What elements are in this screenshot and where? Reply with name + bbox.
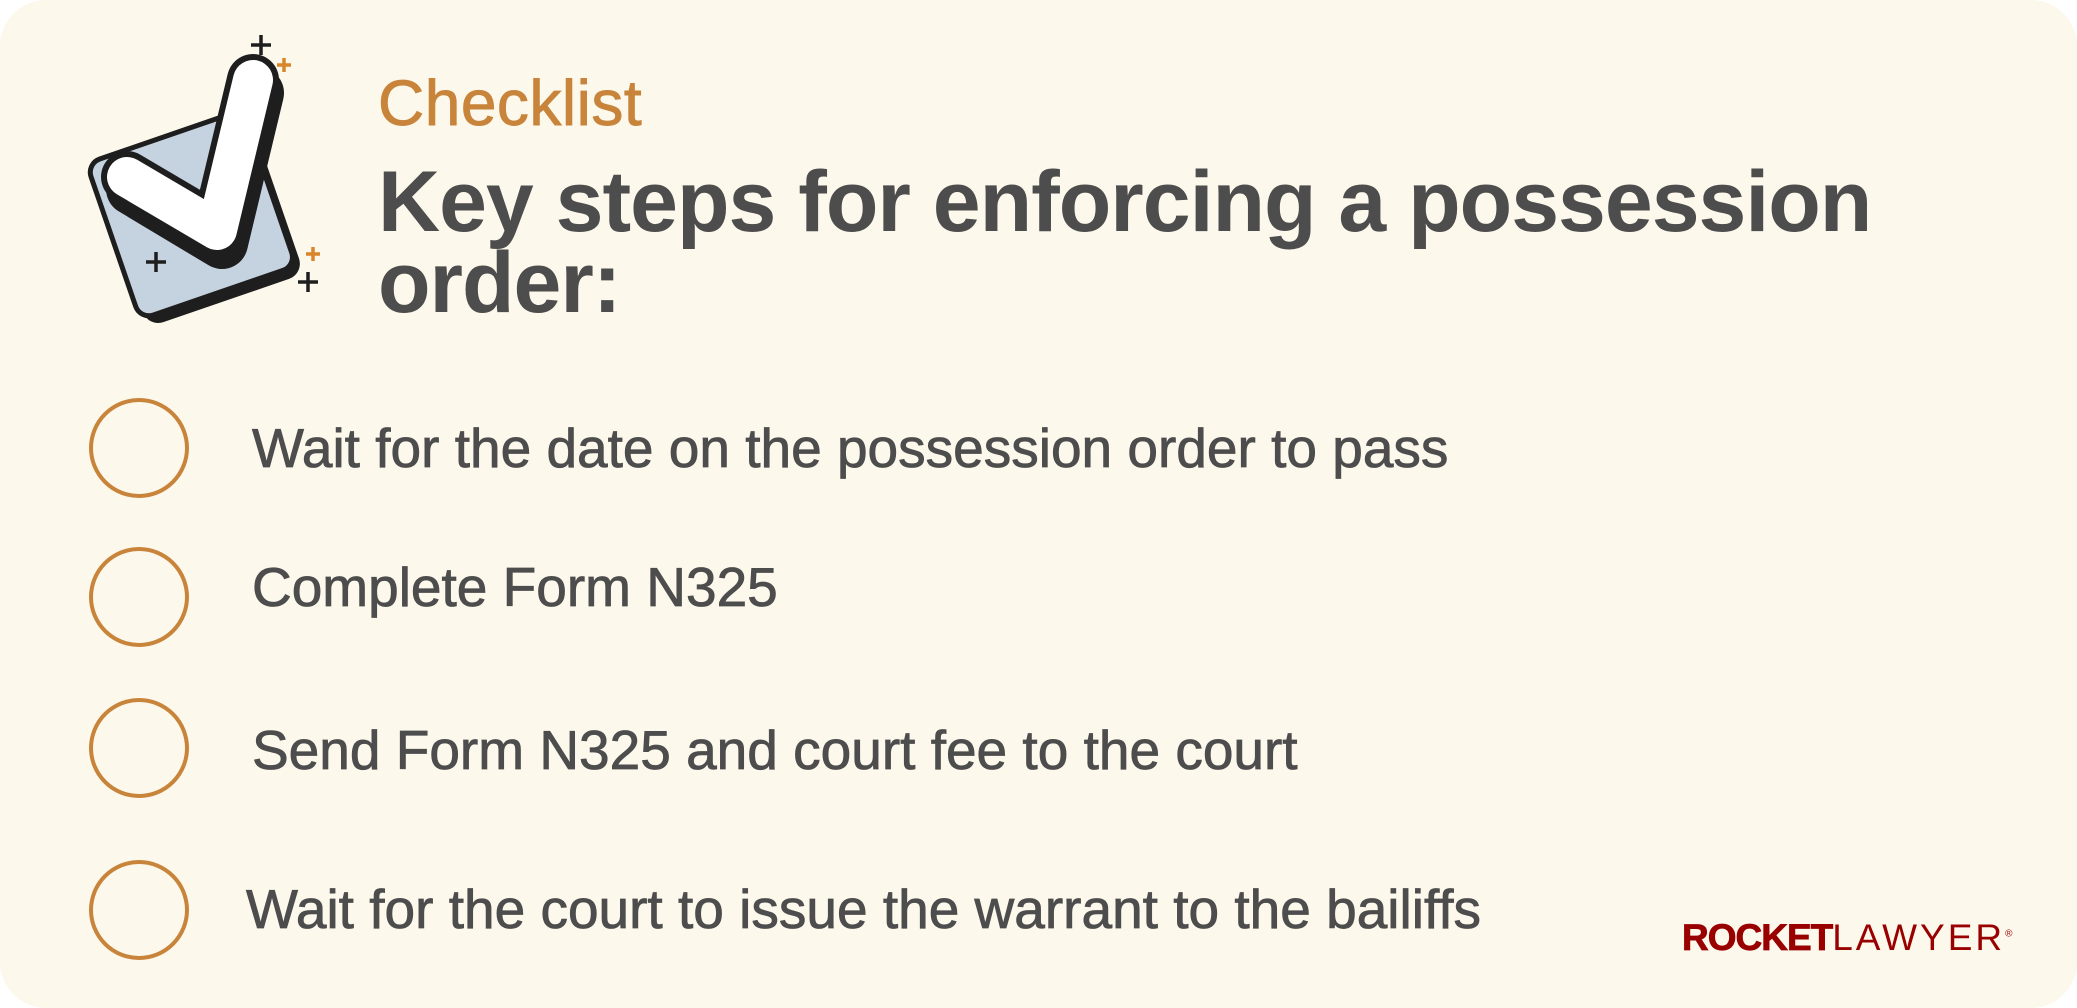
checklist item 2 xyxy=(89,547,778,647)
checklist item 3 xyxy=(89,698,1298,798)
logo: Rocket Lawyer: ROCKETLAWYER® xyxy=(1682,917,2012,958)
checklist item 3: Send Form N325 and court fee to the court xyxy=(252,719,1298,781)
title: Key steps for enforcing a possession xyxy=(378,154,1871,250)
checklist item 1: Wait for the date on the possession order to pass xyxy=(252,417,1448,479)
icon: checkbox with check mark xyxy=(88,35,320,323)
checklist item 4: Wait for the court to issue the warrant to the bailiffs xyxy=(246,878,1481,940)
checklist item 2: Complete Form N325 xyxy=(252,556,778,618)
label: Checklist: Checklist xyxy=(378,67,642,139)
checklist item 1 xyxy=(89,398,1448,498)
checklist item 4 xyxy=(89,860,1481,960)
title xyxy=(378,154,1871,331)
title: order: xyxy=(378,235,620,331)
